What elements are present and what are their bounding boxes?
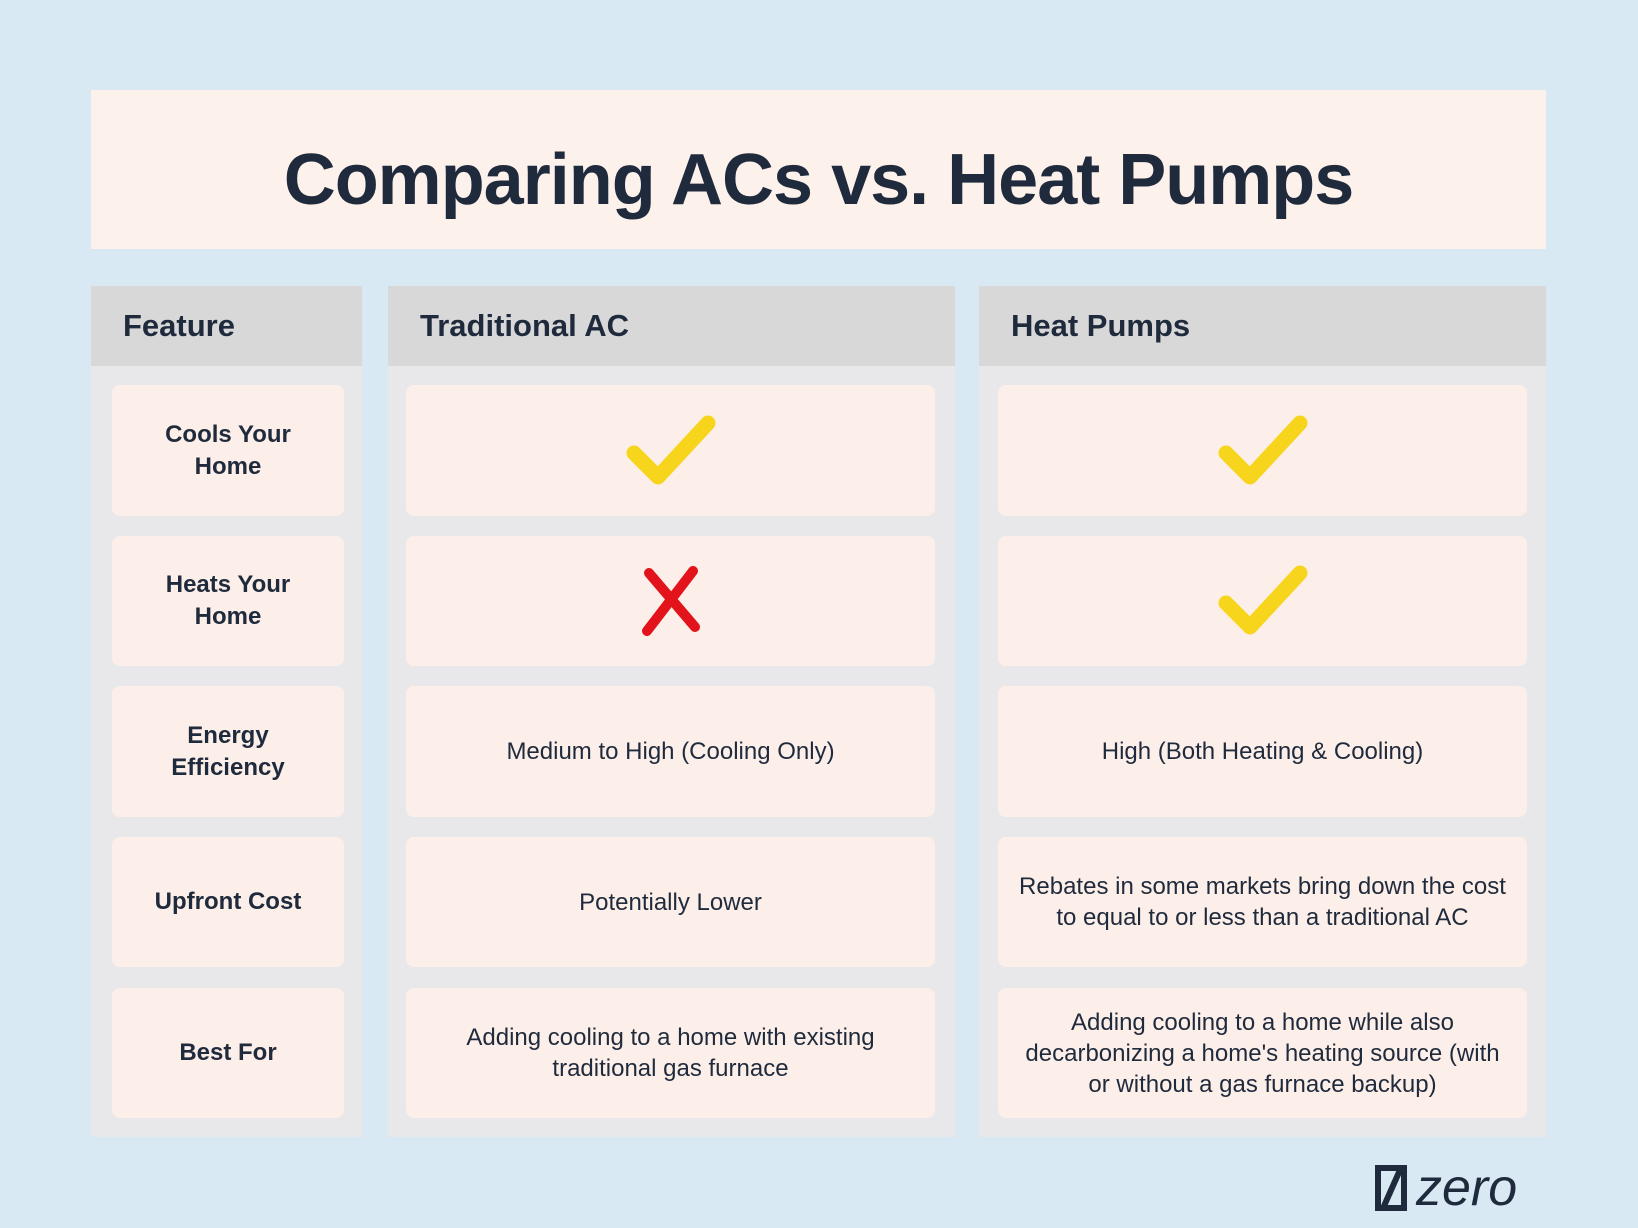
header: feature: Feature xyxy=(123,308,235,343)
header: heat pumps xyxy=(979,286,1546,366)
HP cools: check xyxy=(998,385,1527,516)
AC best for: Adding cooling to a home with existing xyxy=(466,1024,875,1051)
feature: best for: Best For xyxy=(179,1039,277,1066)
feature: cools xyxy=(112,385,344,516)
header: feature xyxy=(91,286,362,366)
HP best for: decarbonizing a home's heating source (with xyxy=(1025,1040,1500,1066)
panel: heat pumps column xyxy=(979,286,1546,1137)
AC efficiency xyxy=(406,686,935,817)
feature: efficiency: Efficiency xyxy=(171,754,285,780)
HP best for: or without a gas furnace backup) xyxy=(1088,1070,1437,1098)
title xyxy=(91,90,1546,249)
AC efficiency: Medium to High (Cooling Only) xyxy=(506,738,835,765)
feature: efficiency: Energy xyxy=(187,722,269,748)
HP cost: to equal to or less than a traditional AC xyxy=(1056,904,1469,931)
feature: upfront cost: Upfront Cost xyxy=(155,888,301,915)
HP heats: check xyxy=(998,536,1527,666)
AC cost xyxy=(406,837,935,967)
title: Comparing ACs vs. Heat Pumps xyxy=(284,140,1353,220)
AC cools: check xyxy=(406,385,935,516)
feature: upfront cost xyxy=(112,837,344,967)
feature: heats: Home xyxy=(195,603,261,630)
logo: zero: zero xyxy=(1416,1159,1517,1217)
AC best for: traditional gas furnace xyxy=(552,1055,789,1082)
panel: traditional AC column xyxy=(388,286,955,1137)
feature: best for xyxy=(112,988,344,1118)
feature: heats: Heats Your xyxy=(166,571,290,598)
panel: feature column xyxy=(91,286,362,1137)
feature: efficiency xyxy=(112,686,344,817)
header: heat pumps: Heat Pumps xyxy=(1011,308,1190,343)
feature: heats xyxy=(112,536,344,666)
feature: cools: Cools Your xyxy=(165,420,291,448)
icon: logo mark xyxy=(1375,1165,1407,1211)
AC best for xyxy=(406,988,935,1118)
HP efficiency xyxy=(998,686,1527,817)
HP efficiency: High (Both Heating & Cooling) xyxy=(1102,738,1423,765)
header: traditional AC xyxy=(388,286,955,366)
HP cost xyxy=(998,837,1527,967)
HP best for: Adding cooling to a home while also xyxy=(1071,1008,1454,1036)
feature: cools: Home xyxy=(195,452,261,480)
HP best for xyxy=(998,988,1527,1118)
header: traditional AC: Traditional AC xyxy=(420,308,629,343)
AC cost: Potentially Lower xyxy=(579,888,762,916)
HP cost: Rebates in some markets bring down the cost xyxy=(1019,873,1506,900)
AC heats: cross xyxy=(406,536,935,666)
